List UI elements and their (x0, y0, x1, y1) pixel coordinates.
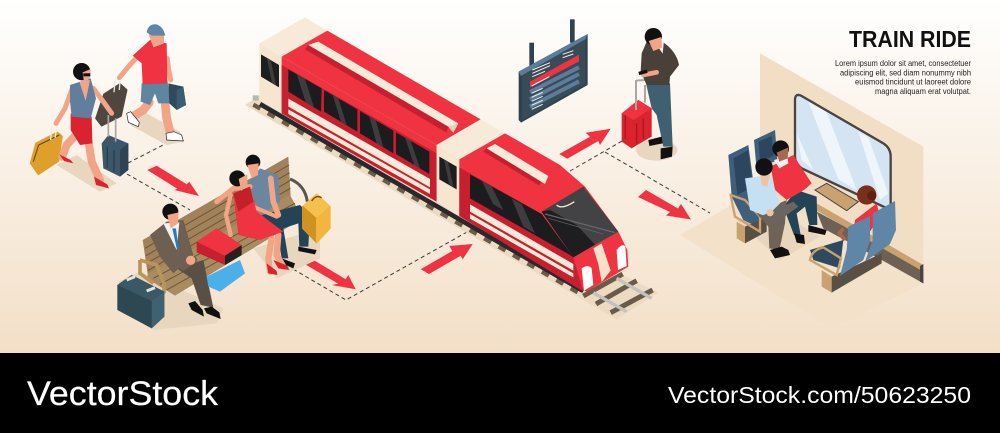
walking woman (56, 63, 112, 188)
coupling hatch (557, 202, 574, 207)
seat base (737, 222, 745, 243)
far seats (728, 130, 820, 260)
description: adipiscing elit, sed diam nonummy nibh (840, 68, 971, 78)
front windows (470, 174, 573, 257)
arrow: bench to platform (303, 258, 356, 289)
panel: train cabin (680, 53, 923, 328)
rear carriage (282, 31, 481, 202)
arrow: platform to train (421, 244, 473, 274)
front track (583, 274, 653, 313)
nose stripes (593, 243, 611, 282)
seated couple woman (226, 170, 289, 275)
windshield (542, 187, 618, 257)
floor shadow (737, 207, 820, 260)
wall ledge (817, 203, 923, 283)
yellow case by bench (303, 194, 330, 243)
panel: walking travellers and bench (31, 24, 330, 330)
bench (140, 157, 307, 296)
description: magna aliquam erat volutpat. (875, 86, 971, 96)
dashed route lines (127, 141, 710, 300)
bench backrest (143, 157, 291, 278)
panel: train on tracks (245, 17, 658, 319)
title: TRAIN RIDE (849, 26, 971, 52)
roof vent front (483, 144, 548, 185)
cabin window (795, 95, 891, 210)
cabin wall (760, 53, 923, 283)
arrow: train to traveller (559, 129, 611, 159)
navy briefcase (117, 275, 164, 328)
brown suitcase (96, 81, 127, 126)
board rows (530, 67, 579, 107)
traveller trousers (646, 83, 673, 147)
seat arm (731, 195, 760, 232)
watermark id: VectorStock.com/50623250 (668, 382, 971, 408)
track shadow (245, 96, 658, 319)
front stripes (470, 204, 573, 277)
board posts (529, 19, 575, 68)
red trolley (622, 80, 652, 148)
cabin floor (680, 188, 923, 328)
seated man in red (771, 140, 827, 244)
watermark logo text: VectorStock (27, 375, 219, 413)
sleepers under train (253, 105, 578, 293)
board text lines (532, 51, 573, 109)
bench right arch (290, 179, 307, 202)
roof vent (305, 42, 458, 133)
yellow suitcase (31, 125, 62, 174)
connector (437, 119, 505, 216)
description: euismod tincidunt ut laoreet dolore (855, 76, 971, 86)
front seats (810, 201, 896, 293)
fold table (815, 183, 858, 211)
rear cream car end (259, 17, 327, 113)
seated couple man (217, 155, 317, 268)
shadows (57, 112, 320, 330)
red case on bench (197, 228, 242, 265)
departures board (519, 19, 588, 123)
navy trolley (102, 115, 128, 177)
woman with laptop (745, 158, 798, 258)
small navy case (168, 83, 186, 110)
front seat passenger (839, 185, 880, 240)
walking man (119, 24, 183, 141)
bench left arm (140, 260, 164, 293)
watermark bar (0, 353, 1000, 433)
traveller with phone (622, 28, 679, 161)
description (835, 58, 971, 96)
side stripes (288, 99, 430, 194)
arrow: people to bench (147, 166, 199, 196)
description: Lorem ipsum dolor sit amet, consectetuer (835, 58, 971, 68)
headlights (582, 245, 627, 291)
carriage windows (288, 69, 429, 174)
blue case (207, 260, 245, 292)
arrow: traveller to cabin (638, 190, 691, 220)
rear buffer (253, 95, 259, 101)
dark rail under train (260, 104, 583, 291)
bench seat (147, 195, 303, 296)
traveller shadow (636, 139, 677, 161)
businessman (150, 204, 221, 319)
front carriage (459, 133, 628, 292)
